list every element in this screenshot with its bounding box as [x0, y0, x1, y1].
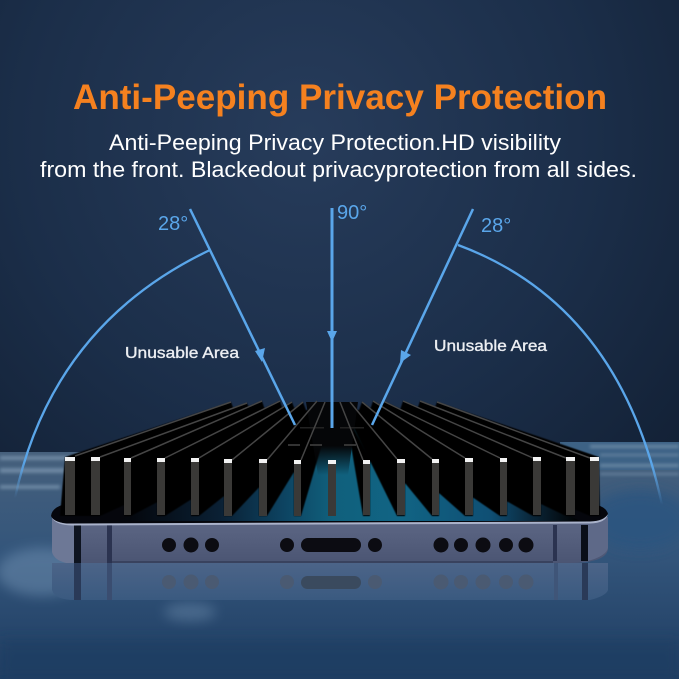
label: right 28 degrees: 28°	[481, 215, 511, 237]
right 28 degree arrow	[372, 209, 473, 425]
front ports	[162, 538, 534, 552]
subtitle	[40, 130, 637, 182]
left 28 degree arrow	[190, 209, 295, 425]
title: Anti-Peeping Privacy Protection	[73, 78, 607, 117]
viewing angle arc: left	[15, 250, 210, 498]
label: 90 degrees: 90°	[337, 202, 367, 224]
viewing angle arc: right	[458, 245, 662, 505]
subtitle: Anti-Peeping Privacy Protection.HD visibility	[109, 130, 561, 155]
center dark grid	[288, 402, 364, 475]
phone reflection	[52, 563, 608, 600]
phone screen glass	[51, 402, 608, 526]
louver posts	[65, 457, 599, 516]
subtitle: from the front. Blackedout privacyprotection from all sides.	[40, 157, 637, 182]
label: left 28 degrees: 28°	[158, 213, 188, 235]
label: right unusable area: Unusable Area	[434, 338, 547, 355]
privacy louver fins	[60, 401, 600, 516]
fin top edges	[75, 401, 590, 460]
phone body	[52, 517, 608, 563]
center 90 degree arrow	[327, 208, 337, 428]
label: left unusable area: Unusable Area	[125, 345, 239, 362]
